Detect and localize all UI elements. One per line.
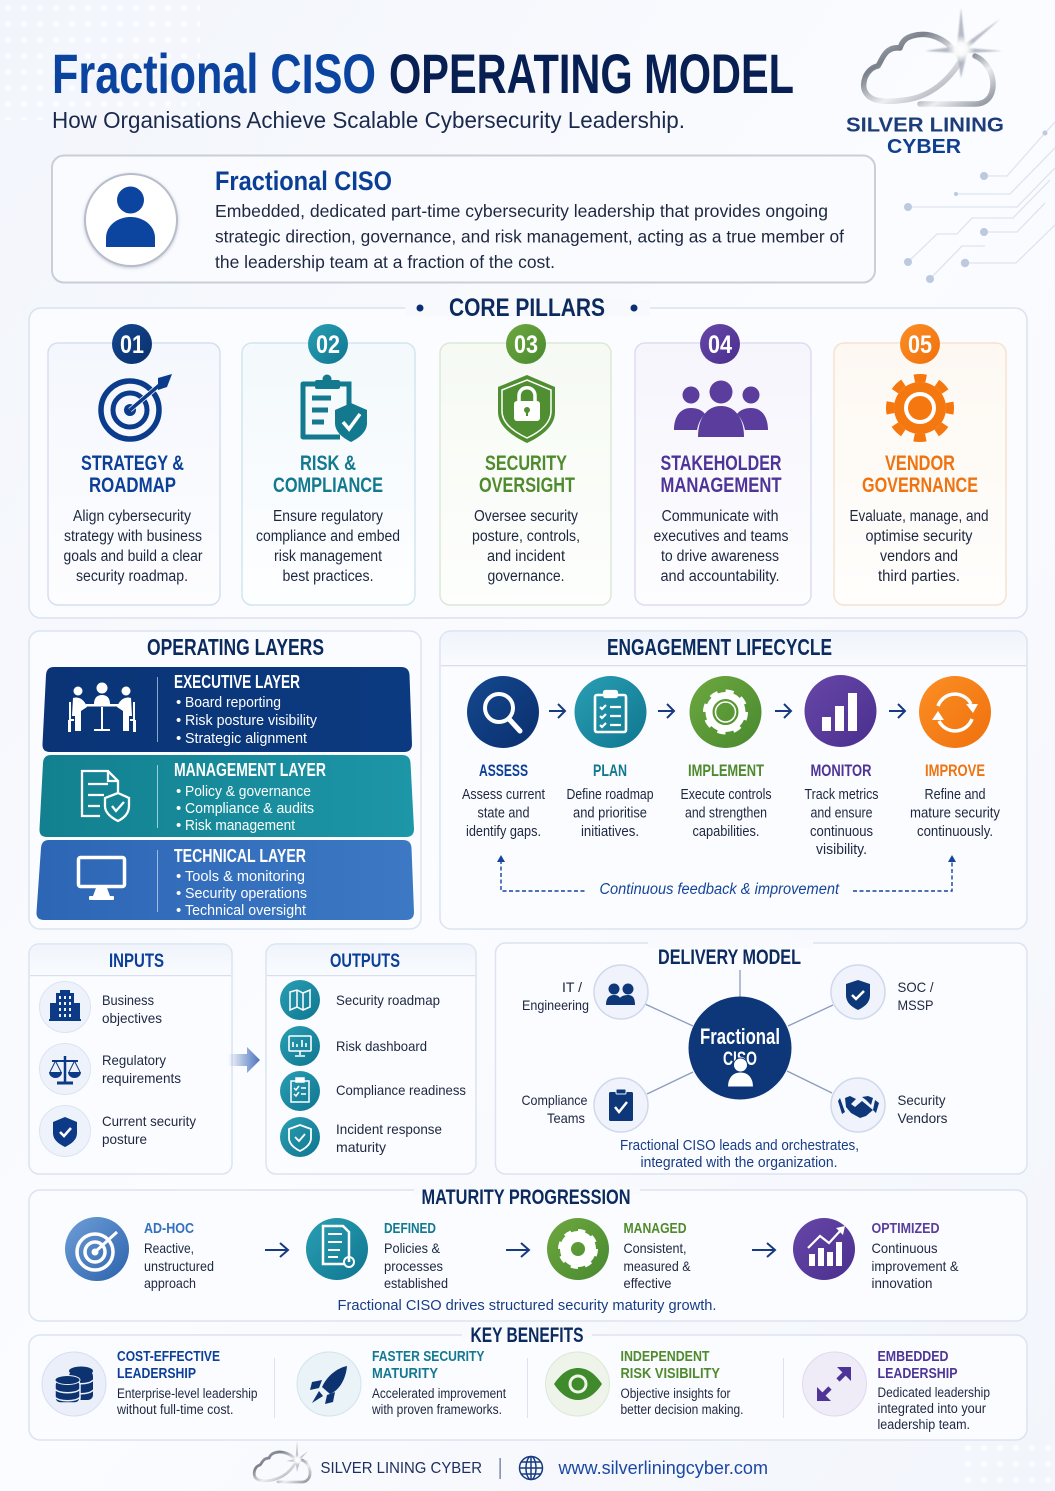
icon: expand arrows	[817, 1367, 851, 1401]
arrow	[549, 704, 565, 718]
executive layer text: •	[176, 730, 181, 747]
icon: footer cloud	[254, 1441, 310, 1482]
panel: Fractional CISO definition	[52, 156, 875, 282]
hub: Fractional CISO: CISO	[723, 1049, 757, 1070]
technical layer text	[174, 846, 307, 919]
benefit text: FASTER SECURITY	[372, 1349, 485, 1365]
implement body: capabilities.	[692, 824, 760, 840]
technical layer text: Security operations	[185, 885, 307, 902]
pillar 3: security oversight	[440, 324, 611, 605]
management layer	[39, 755, 414, 837]
output label: maturity	[336, 1139, 386, 1155]
step: implement	[680, 676, 772, 840]
icon: person	[728, 1058, 754, 1087]
output: risk dashboard	[280, 1026, 427, 1066]
pillar 3 title	[479, 451, 575, 497]
pillar 4 body: to drive awareness	[661, 548, 779, 565]
title	[52, 42, 794, 105]
pillar 3 title: SECURITY	[485, 451, 567, 475]
output: incident response maturity	[280, 1117, 442, 1157]
badge 05: 05	[908, 331, 932, 359]
monitor body: visibility.	[816, 842, 867, 858]
stage: ad-hoc: unstructured	[144, 1258, 214, 1274]
icon: coin stacks	[55, 1366, 93, 1403]
node label: IT /	[562, 979, 582, 995]
benefit text: COST-EFFECTIVE	[117, 1349, 220, 1365]
implement body	[680, 787, 772, 840]
icon: magnifier	[485, 694, 520, 731]
pillar 1 title: STRATEGY &	[81, 451, 184, 475]
icon: bar chart	[822, 693, 857, 731]
badge 02	[308, 324, 348, 364]
pillar 1 body: security roadmap.	[76, 568, 188, 585]
benefit: embedded leadership: Dedicated leadership	[878, 1385, 990, 1400]
benefit: independent risk visibility: Objective insights for	[620, 1386, 731, 1401]
footer divider	[500, 1458, 501, 1479]
stage: defined: Policies &	[384, 1240, 441, 1256]
panel: outputs	[266, 944, 476, 1174]
hub: Fractional CISO: Fractional	[700, 1024, 780, 1049]
arrow	[752, 1243, 775, 1257]
pillar 3 body: governance.	[488, 568, 564, 585]
assess body	[462, 787, 545, 840]
benefit: faster security maturity	[297, 1349, 506, 1417]
pillar 2: risk and compliance	[242, 324, 415, 605]
logo wordmark: CYBER	[887, 135, 961, 158]
definition body	[215, 201, 844, 272]
logo: Silver Lining Cyber	[846, 8, 1004, 158]
heading dot left	[416, 304, 424, 312]
management layer text	[174, 760, 326, 834]
management layer text: •	[176, 800, 181, 817]
icon: scales	[49, 1056, 81, 1083]
heading: core pillars: CORE PILLARS	[449, 294, 605, 322]
pillar 5: vendor governance	[834, 324, 1006, 605]
icon: dashboard monitor	[289, 1036, 311, 1056]
monitor body: continuous	[810, 824, 873, 840]
benefit dividers	[274, 1358, 784, 1418]
pillar 2 body: compliance and embed	[256, 528, 400, 545]
executive layer text: Board reporting	[185, 694, 281, 711]
badge 01: 01	[120, 331, 144, 359]
icon: clipboard check	[609, 1089, 633, 1121]
stage: defined: established	[384, 1275, 448, 1291]
step: monitor	[804, 675, 878, 858]
pillar 1 title	[81, 451, 184, 497]
icon: rocket	[310, 1366, 347, 1404]
technical layer	[36, 840, 414, 920]
definition body: strategic direction, governance, and risk management, acting as a true member of	[215, 226, 844, 246]
output label: Compliance readiness	[336, 1082, 466, 1098]
pillar 3 body: posture, controls,	[472, 528, 580, 545]
stage: optimized	[793, 1218, 959, 1291]
benefit text	[878, 1349, 958, 1382]
output label: Security roadmap	[336, 992, 440, 1008]
delivery caption: integrated with the organization.	[640, 1155, 838, 1171]
feedback loop arrows	[497, 855, 956, 891]
executive layer text	[174, 672, 317, 747]
plan body	[566, 787, 654, 840]
pillar 3 title: OVERSIGHT	[479, 473, 575, 497]
icon: silver cloud	[864, 34, 993, 104]
footer	[254, 1441, 768, 1482]
pillar 2 title	[273, 451, 383, 497]
pillar 4 title: MANAGEMENT	[660, 473, 782, 497]
node: Security Vendors	[831, 1078, 948, 1132]
pillar 4 body: and accountability.	[660, 568, 780, 585]
benefit: embedded leadership	[802, 1349, 990, 1432]
management layer text: Compliance & audits	[185, 800, 314, 817]
stage: defined: processes	[384, 1258, 443, 1274]
monitor body	[804, 787, 878, 858]
plan body: Define roadmap	[566, 787, 654, 803]
management layer text: MANAGEMENT LAYER	[174, 760, 326, 780]
maturity caption: Fractional CISO drives structured security maturity growth.	[338, 1297, 716, 1314]
input: business objectives	[40, 982, 162, 1032]
icon: shield check	[846, 980, 870, 1010]
step: improve	[910, 676, 1001, 840]
pillar 4 title: STAKEHOLDER	[660, 451, 782, 475]
badge 03: 03	[514, 331, 538, 359]
pillar 4: stakeholder management	[635, 324, 811, 605]
stage: defined	[306, 1218, 448, 1291]
pillar 4 body	[654, 508, 789, 585]
arrow	[658, 704, 674, 718]
node label	[898, 1092, 948, 1126]
benefit text	[372, 1349, 485, 1382]
plan body: initiatives.	[581, 824, 639, 840]
node label	[522, 979, 589, 1013]
stage: optimized: improvement &	[872, 1258, 959, 1274]
assess body: Assess current	[462, 787, 545, 803]
benefit text: LEADERSHIP	[878, 1366, 958, 1382]
plan label: PLAN	[593, 762, 627, 780]
definition heading: Fractional CISO	[215, 166, 392, 196]
subtitle: How Organisations Achieve Scalable Cybersecurity Leadership.	[52, 107, 685, 133]
node label: Engineering	[522, 997, 589, 1013]
pillar 2 body: Ensure regulatory	[273, 508, 383, 525]
footer brand: SILVER LINING CYBER	[320, 1460, 482, 1477]
icon: document with shield	[82, 771, 129, 821]
icon: shield with padlock	[498, 375, 555, 443]
input label: requirements	[102, 1070, 181, 1086]
executive layer text: •	[176, 712, 181, 729]
benefit: independent risk visibility: better decision making.	[620, 1402, 744, 1417]
heading: maturity progression: MATURITY PROGRESSION	[422, 1186, 630, 1209]
badge 03	[506, 324, 546, 364]
technical layer text: Tools & monitoring	[185, 868, 305, 885]
stage: managed: measured &	[624, 1258, 691, 1274]
implement label: IMPLEMENT	[688, 762, 764, 780]
pillar 1 body	[64, 508, 202, 585]
icon: monitor	[78, 858, 124, 900]
input label	[102, 992, 162, 1026]
implement body: and strengthen	[685, 806, 767, 822]
management layer text: Risk management	[185, 817, 296, 834]
node label: Security	[898, 1092, 946, 1108]
pillar 2 body: risk management	[274, 548, 383, 565]
executive layer text: EXECUTIVE LAYER	[174, 672, 300, 692]
icon: shield check outline	[289, 1125, 311, 1151]
badge 04: 04	[708, 331, 732, 359]
benefit text: INDEPENDENT	[620, 1349, 710, 1365]
pillar 5 body	[850, 508, 988, 585]
monitor body: Track metrics	[804, 787, 878, 803]
assess body: state and	[478, 806, 530, 822]
stage: optimized: Continuous	[872, 1240, 938, 1256]
implement body: Execute controls	[680, 787, 772, 803]
input label	[102, 1113, 196, 1147]
icon: target	[77, 1232, 117, 1270]
pillar 1 body: strategy with business	[64, 528, 202, 545]
pillar 1 title: ROADMAP	[89, 473, 176, 497]
technical layer text: •	[176, 885, 181, 902]
icon: handshake	[838, 1096, 879, 1118]
stage: managed: effective	[624, 1275, 672, 1291]
pillar 2 body: best practices.	[282, 568, 374, 585]
node label	[898, 979, 934, 1013]
benefit: cost-effective leadership: without full-time cost.	[116, 1402, 234, 1417]
divider	[157, 850, 158, 912]
panel: key benefits	[29, 1324, 1027, 1440]
monitor body: and ensure	[810, 806, 872, 822]
icon: shield check	[53, 1117, 77, 1147]
pillar 5 body: Evaluate, manage, and	[850, 508, 988, 525]
pillar 4 body: executives and teams	[654, 528, 789, 545]
assess label: ASSESS	[479, 762, 528, 780]
output: security roadmap	[280, 980, 440, 1020]
stage: ad-hoc: Reactive,	[144, 1240, 194, 1256]
pillar 1 body: goals and build a clear	[64, 548, 202, 565]
icon: rising bar chart	[808, 1226, 845, 1266]
divider	[157, 677, 158, 742]
title: Fractional CISO	[52, 42, 376, 105]
definition body: the leadership team at a fraction of the cost.	[215, 252, 555, 272]
heading: operating layers: OPERATING LAYERS	[147, 634, 324, 660]
pillar 4 body: Communicate with	[662, 508, 778, 525]
benefit text	[620, 1349, 720, 1382]
hub: Fractional CISO	[688, 996, 792, 1100]
node: SOC / MSSP	[831, 965, 934, 1019]
benefit: independent risk visibility	[546, 1349, 744, 1417]
heading: inputs: INPUTS	[109, 951, 164, 972]
pillar 3 body: Oversee security	[474, 508, 578, 525]
improve body: mature security	[910, 806, 1001, 822]
badge 05	[900, 324, 940, 364]
benefit text: LEADERSHIP	[117, 1366, 196, 1382]
pillar 1 body: Align cybersecurity	[73, 508, 191, 525]
pillar 5 title: GOVERNANCE	[862, 473, 978, 497]
management layer text: •	[176, 817, 181, 834]
improve label: IMPROVE	[925, 762, 985, 780]
input label: Business	[102, 992, 154, 1008]
arrow	[265, 1243, 288, 1257]
stage: optimized: innovation	[872, 1275, 932, 1291]
badge 01	[112, 324, 152, 364]
heading: engagement lifecycle: ENGAGEMENT LIFECYCLE	[607, 634, 832, 660]
pillar 5 title	[862, 451, 978, 497]
benefit: embedded leadership: integrated into your	[878, 1401, 986, 1416]
technical layer text: Technical oversight	[185, 902, 307, 919]
heading: outputs: OUTPUTS	[330, 951, 400, 972]
stage: managed: Consistent,	[624, 1240, 686, 1256]
step: assess	[462, 676, 545, 840]
input label	[102, 1052, 181, 1086]
pillar 5 title: VENDOR	[885, 451, 955, 475]
logo wordmark: SILVER LINING	[846, 114, 1004, 136]
divider	[157, 765, 158, 828]
input label: Regulatory	[102, 1052, 166, 1068]
pillar 1: strategy and roadmap	[48, 324, 220, 605]
benefit: faster security maturity: with proven frameworks.	[371, 1402, 502, 1417]
stage: ad-hoc: approach	[144, 1275, 196, 1291]
pillar 3 body	[472, 508, 580, 585]
icon: map	[290, 990, 310, 1010]
management layer text: Policy & governance	[185, 783, 311, 800]
pillar 3 body: and incident	[487, 548, 566, 565]
technical layer text: •	[176, 902, 181, 919]
node label: Compliance	[522, 1092, 588, 1108]
output label: Risk dashboard	[336, 1038, 427, 1054]
heading: delivery model: DELIVERY MODEL	[658, 946, 801, 969]
panel: core pillars	[29, 294, 1027, 618]
icon: gear	[560, 1232, 596, 1266]
panel: delivery model	[496, 940, 1027, 1174]
executive layer text: •	[176, 694, 181, 711]
heading: key benefits: KEY BENEFITS	[470, 1324, 584, 1347]
benefit: cost-effective leadership	[42, 1349, 258, 1417]
input label: Current security	[102, 1113, 196, 1129]
input label: posture	[102, 1131, 147, 1147]
hub connector lines	[645, 970, 833, 1094]
stage: managed	[547, 1218, 691, 1291]
pillar 5 body: optimise security	[866, 528, 973, 545]
pillar 2 title: RISK &	[300, 451, 356, 475]
feedback caption: Continuous feedback & improvement	[600, 881, 840, 898]
managed text: MANAGED	[624, 1221, 686, 1237]
stage: ad-hoc	[65, 1217, 214, 1291]
improve body: continuously.	[917, 824, 993, 840]
node label: SOC /	[898, 979, 934, 995]
icon: people group	[674, 380, 768, 437]
badge 04	[700, 324, 740, 364]
arrow	[775, 704, 791, 718]
panel: maturity progression	[29, 1186, 1027, 1321]
pillar 2 title: COMPLIANCE	[273, 473, 383, 497]
definition body: Embedded, dedicated part-time cybersecurity leadership that provides ongoing	[215, 201, 828, 221]
icon: sparkle	[925, 8, 1002, 78]
node label: MSSP	[898, 997, 934, 1013]
delivery caption	[620, 1138, 859, 1171]
icon: two people	[606, 984, 635, 1005]
step: plan	[566, 676, 654, 840]
footer url: www.silverliningcyber.com	[557, 1458, 768, 1478]
benefit text: EMBEDDED	[878, 1349, 948, 1365]
executive layer	[42, 667, 412, 752]
arrow: inputs to outputs	[228, 1047, 260, 1073]
node label: Vendors	[898, 1110, 948, 1126]
improve body	[910, 787, 1001, 840]
monitor label: MONITOR	[810, 762, 872, 780]
panel: operating layers	[29, 631, 421, 929]
pillar 5 body: third parties.	[878, 568, 960, 585]
icon: person avatar	[85, 174, 177, 266]
benefit text	[117, 1349, 220, 1382]
output label	[336, 1121, 442, 1155]
icon: meeting table	[68, 682, 136, 732]
pillar 5 body: vendors and	[880, 548, 958, 565]
icon: globe	[520, 1456, 542, 1480]
optimized text: OPTIMIZED	[872, 1221, 940, 1237]
panel: inputs	[29, 944, 232, 1174]
node label: Teams	[547, 1110, 585, 1126]
delivery caption: Fractional CISO leads and orchestrates,	[620, 1138, 859, 1154]
badge 02: 02	[316, 331, 340, 359]
plan body: and prioritise	[573, 806, 647, 822]
defined text: DEFINED	[384, 1221, 436, 1237]
benefit: embedded leadership: leadership team.	[878, 1417, 970, 1432]
input label: objectives	[102, 1010, 162, 1026]
assess body: identify gaps.	[466, 824, 541, 840]
benefit text: MATURITY	[372, 1366, 438, 1382]
pillar 4 title	[660, 451, 782, 497]
panel: engagement lifecycle	[440, 631, 1027, 929]
benefit: faster security maturity: Accelerated improvement	[372, 1386, 506, 1401]
executive layer text: Strategic alignment	[185, 730, 308, 747]
logo wordmark	[846, 114, 1004, 158]
technical layer text: •	[176, 868, 181, 885]
output label: Incident response	[336, 1121, 442, 1137]
benefit: cost-effective leadership: Enterprise-level leadership	[117, 1386, 258, 1401]
output: compliance readiness	[280, 1071, 466, 1111]
node: IT / Engineering	[522, 965, 648, 1019]
arrow	[889, 704, 905, 718]
icon: gear	[706, 692, 746, 732]
icon: checklist clipboard	[595, 691, 626, 732]
input: current security posture	[40, 1106, 196, 1156]
benefit text: RISK VISIBILITY	[620, 1366, 720, 1382]
management layer text: •	[176, 783, 181, 800]
title: OPERATING MODEL	[389, 42, 794, 105]
technical layer text: TECHNICAL LAYER	[174, 846, 306, 866]
icon: clipboard with shield	[303, 374, 367, 442]
arrow	[506, 1243, 529, 1257]
improve body: Refine and	[924, 787, 986, 803]
icon: target	[101, 374, 172, 439]
ad-hoc text: AD-HOC	[144, 1221, 194, 1237]
icon: refresh arrows	[932, 694, 978, 731]
icon: eye	[554, 1368, 602, 1400]
node label	[522, 1092, 588, 1126]
executive layer text: Risk posture visibility	[185, 712, 317, 729]
icon: clipboard checklist	[291, 1078, 309, 1102]
heading dot right	[630, 304, 638, 312]
node: Compliance Teams	[522, 1078, 648, 1132]
background circuit decoration	[904, 122, 1055, 283]
input: regulatory requirements	[40, 1044, 181, 1094]
icon: gear	[890, 378, 950, 438]
icon: office building	[49, 990, 81, 1021]
icon: document	[323, 1226, 354, 1267]
pillar 2 body	[256, 508, 400, 585]
